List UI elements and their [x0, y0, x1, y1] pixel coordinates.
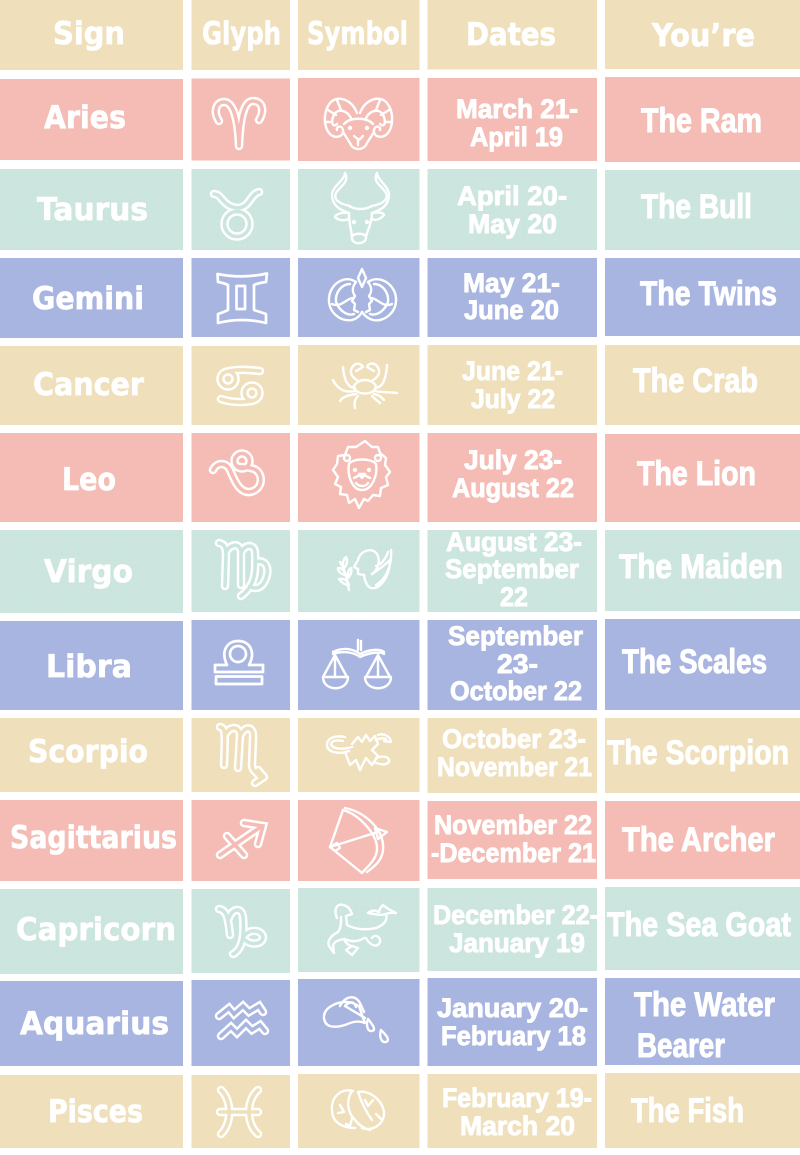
title: The Bull: The Bull — [641, 188, 752, 226]
dates: Libra: September — [448, 621, 583, 651]
sign cell: Sagittarius — [0, 800, 183, 881]
dates: Aquarius — [428, 978, 597, 1066]
icon: Scorpio glyph — [220, 727, 264, 783]
icon: maiden symbol — [338, 550, 391, 590]
sign cell: Aquarius — [0, 981, 183, 1066]
dates: Capricorn — [428, 888, 598, 971]
header row — [0, 0, 800, 70]
dates: Leo — [428, 433, 597, 522]
header cell: Symbol — [298, 0, 420, 70]
row: Virgo — [0, 527, 800, 613]
sign cell: Libra: Libra — [46, 649, 132, 685]
sign cell: Taurus: Taurus — [37, 192, 148, 228]
title: The Archer — [605, 801, 800, 879]
dates: Scorpio: October 23- — [442, 724, 586, 754]
dates: Cancer — [428, 345, 597, 425]
title: The Twins — [605, 258, 800, 336]
icon: scorpion symbol — [327, 734, 391, 770]
title: The Maiden — [605, 530, 800, 611]
icon: Virgo glyph — [219, 543, 267, 596]
title: The Ram: The Ram — [641, 102, 762, 140]
row: Libra — [0, 619, 800, 710]
sign cell: Leo: Leo — [62, 462, 116, 498]
title: The Archer: The Archer — [622, 821, 775, 859]
dates: Virgo: August 23- — [446, 527, 582, 557]
dates: Taurus: May 20 — [468, 209, 557, 239]
sign cell: Sagittarius: Sagittarius — [10, 820, 177, 856]
dates: Aquarius: January 20- — [437, 993, 588, 1023]
dates: Virgo: September — [445, 554, 579, 584]
sign cell: Gemini — [0, 258, 183, 338]
icon: scales symbol — [323, 640, 391, 688]
icon: Cancer glyph — [220, 370, 260, 402]
row: Taurus — [0, 169, 800, 250]
sign cell: Aries: Aries — [44, 100, 126, 136]
icon: Libra glyph — [215, 641, 263, 684]
sign cell: Capricorn — [0, 889, 183, 974]
icon: Leo glyph — [213, 454, 261, 492]
title: The Lion — [605, 434, 800, 522]
sign cell: Capricorn: Capricorn — [16, 912, 176, 948]
dates: Taurus — [428, 169, 597, 250]
dates: Scorpio: November 21 — [437, 752, 592, 782]
sign cell: Gemini: Gemini — [32, 281, 144, 317]
title: The Crab — [605, 345, 800, 425]
header cell: Dates — [428, 0, 597, 70]
header cell: Symbol: Symbol — [307, 16, 408, 52]
sign cell: Taurus — [0, 169, 183, 250]
dates: Taurus: April 20- — [457, 181, 567, 211]
dates: Sagittarius — [428, 801, 597, 879]
sign cell: Virgo — [0, 530, 183, 613]
dates: Capricorn: January 19 — [449, 928, 585, 958]
header cell: You're — [605, 0, 800, 69]
sign cell: Cancer — [0, 346, 183, 425]
dates: Gemini: June 20 — [464, 295, 559, 325]
dates: Pisces: February 19- — [442, 1083, 592, 1113]
sign cell: Cancer: Cancer — [33, 367, 145, 403]
title: The Fish — [605, 1073, 800, 1148]
dates: Libra — [428, 620, 597, 710]
icon: ram symbol — [325, 99, 392, 149]
sign cell: Aquarius: Aquarius — [20, 1006, 169, 1042]
dates: Sagittarius: -December 21 — [431, 838, 596, 868]
header cell: You're: You’re — [651, 18, 755, 54]
dates: Pisces — [428, 1074, 597, 1148]
sign cell: Pisces: Pisces — [48, 1094, 143, 1130]
dates: Leo: August 22 — [452, 473, 574, 503]
row: Scorpio — [0, 718, 800, 793]
title: The Bull — [605, 170, 800, 250]
row: Leo — [0, 433, 800, 522]
row: Capricorn — [0, 887, 800, 974]
header cell: Sign: Sign — [53, 16, 125, 52]
sign cell: Virgo: Virgo — [44, 554, 133, 590]
header cell: Glyph: Glyph — [202, 16, 281, 52]
dates: Libra: 23- — [497, 649, 538, 679]
sign cell: Aries — [0, 79, 183, 160]
dates: Leo: July 23- — [464, 445, 562, 475]
dates: Aquarius: February 18 — [441, 1021, 586, 1051]
dates: Pisces: March 20 — [460, 1111, 575, 1141]
title: The Scorpion — [605, 718, 800, 793]
title: The Fish: The Fish — [631, 1092, 744, 1130]
title: The Sea Goat — [605, 887, 800, 970]
icon: lion symbol — [333, 441, 390, 508]
dates: Virgo: 22 — [500, 582, 528, 612]
row: Pisces — [0, 1073, 800, 1148]
icon: bow and arrow symbol — [330, 808, 387, 873]
title: The Ram — [605, 77, 800, 162]
header cell: Sign — [0, 0, 183, 70]
dates: Aries: April 19 — [470, 122, 563, 152]
icon: Capricorn glyph — [219, 909, 263, 954]
icon: two fish symbol — [332, 1090, 384, 1130]
title: The Water Bearer — [605, 978, 800, 1065]
icon: Taurus glyph — [214, 192, 259, 236]
icon: Aquarius glyph — [219, 1006, 265, 1036]
title: The Water Bearer: Bearer — [637, 1027, 725, 1065]
dates: Cancer: July 22 — [471, 384, 555, 414]
header cell: Glyph — [192, 0, 290, 70]
icon: Aries glyph — [216, 101, 262, 146]
title: The Water Bearer: The Water — [634, 986, 775, 1024]
row: Sagittarius — [0, 800, 800, 881]
dates: Gemini — [428, 258, 597, 337]
icon: sea goat symbol — [328, 905, 396, 955]
title: The Twins: The Twins — [640, 275, 777, 313]
dates: Cancer: June 21- — [462, 356, 563, 386]
dates: Scorpio — [428, 718, 597, 793]
dates: Aries: March 21- — [456, 94, 578, 124]
icon: twins symbol — [329, 269, 396, 320]
sign cell: Libra — [0, 621, 183, 710]
sign cell: Scorpio: Scorpio — [28, 734, 148, 770]
title: The Crab: The Crab — [633, 362, 758, 400]
title: The Scales: The Scales — [622, 643, 767, 681]
dates: Virgo — [428, 527, 597, 612]
row: Gemini — [0, 258, 800, 338]
row: Aquarius — [0, 978, 800, 1066]
sign cell: Pisces — [0, 1075, 183, 1148]
icon: Pisces glyph — [220, 1090, 258, 1134]
header cell: Dates: Dates — [466, 17, 556, 53]
dates: Sagittarius: November 22 — [434, 810, 592, 840]
dates: Capricorn: December 22- — [433, 900, 598, 930]
icon: Gemini glyph — [218, 274, 267, 323]
icon: bull symbol — [332, 173, 389, 243]
row: Cancer — [0, 345, 800, 425]
dates: Libra: October 22 — [450, 676, 582, 706]
row: Aries — [0, 77, 800, 162]
dates: Aries — [428, 78, 597, 161]
icon: water jug symbol — [324, 997, 388, 1042]
sign cell: Leo — [0, 433, 183, 522]
title: The Scales — [605, 619, 800, 710]
icon: Sagittarius glyph — [220, 823, 263, 855]
icon: crab symbol — [333, 364, 397, 408]
title: The Lion: The Lion — [637, 455, 756, 493]
dates: Gemini: May 21- — [463, 268, 560, 298]
sign cell: Scorpio — [0, 718, 183, 792]
